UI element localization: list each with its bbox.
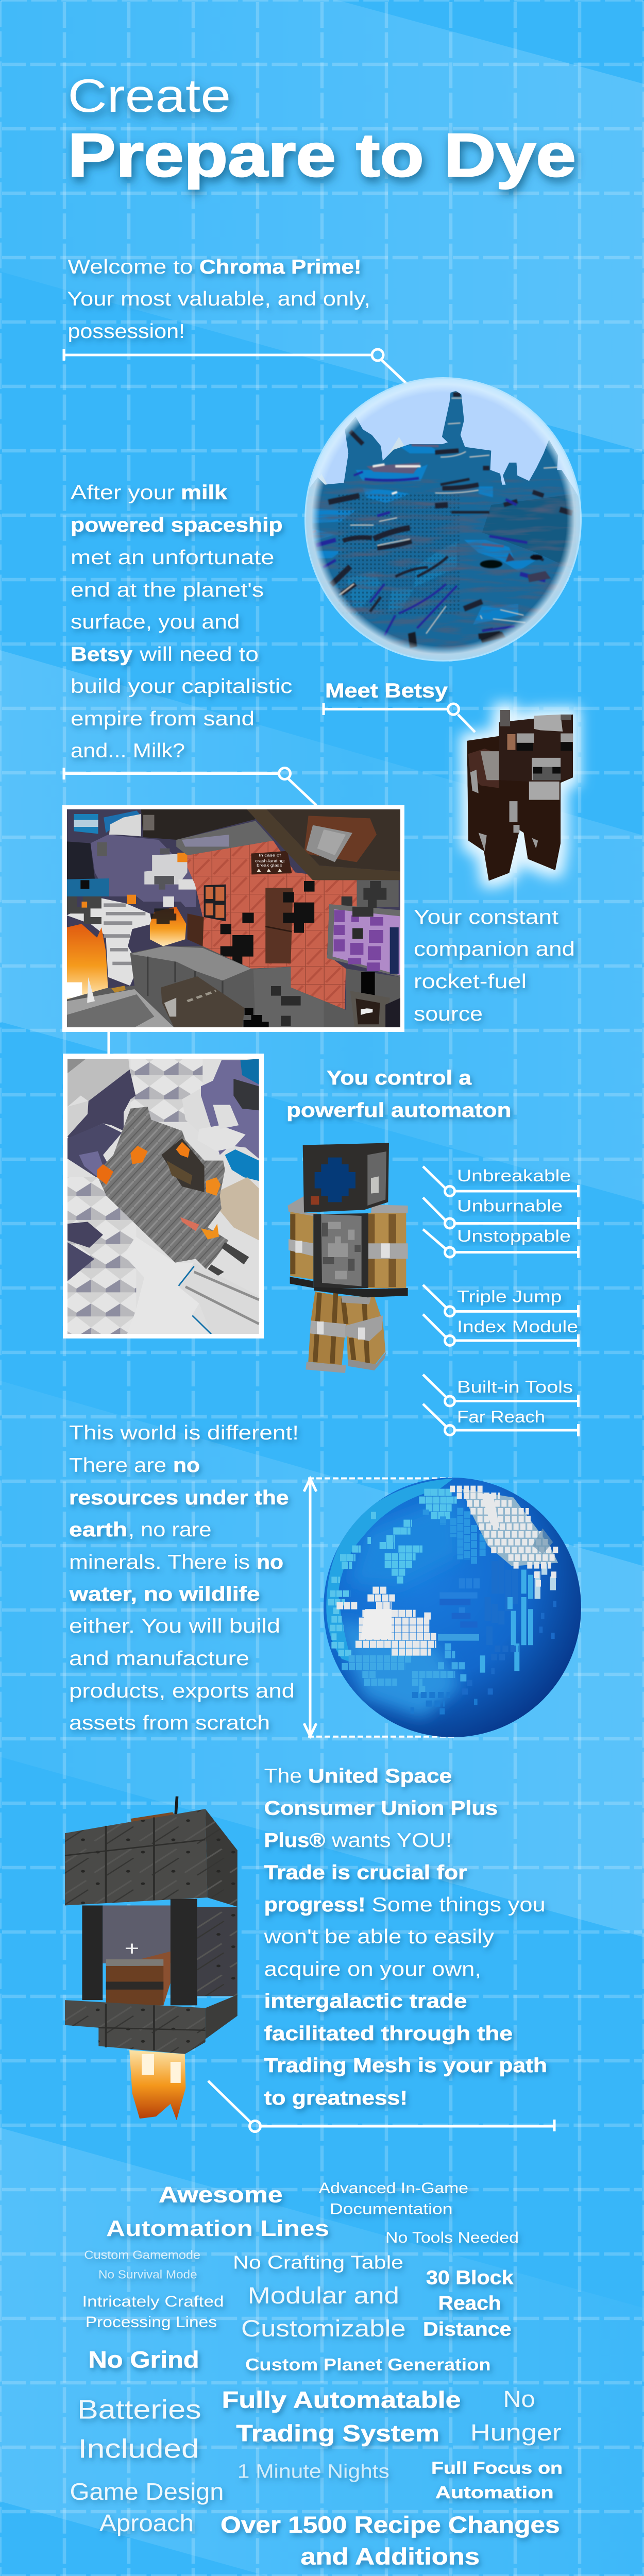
- intro text: Your most valuable, and only,: [67, 288, 370, 310]
- story text: After your: [71, 482, 175, 504]
- world description text: earth: [69, 1519, 127, 1541]
- feature word cloud: No: [503, 2386, 535, 2412]
- feature word cloud: No Grind: [88, 2346, 199, 2373]
- trade text: intergalactic trade: [264, 1990, 467, 2012]
- feature word cloud: Documentation: [330, 2200, 452, 2217]
- trade text: facilitated through the: [264, 2023, 513, 2045]
- feature word cloud: Game Design: [70, 2478, 224, 2505]
- world description text: no: [257, 1551, 283, 1573]
- icon: betsy the cow: [467, 710, 573, 881]
- text: betsy description: rocket-fuel: [414, 971, 527, 993]
- label: unbreakable: Unbreakable: [457, 1166, 571, 1185]
- title: [68, 70, 576, 190]
- feature word cloud: Aproach: [99, 2510, 194, 2536]
- callout line to first screenshot: [64, 768, 316, 805]
- label: unbreakable: [423, 1166, 578, 1197]
- text: betsy description: [414, 906, 575, 1025]
- story text: met an unfortunate: [71, 547, 274, 569]
- image: crash site screenshot: break glass: [257, 863, 282, 868]
- label: unburnable: [423, 1196, 578, 1229]
- trade text: won't be able to easily: [263, 1926, 495, 1948]
- feature word cloud: Distance: [423, 2319, 511, 2341]
- heading: automaton: [286, 1067, 511, 1122]
- trade text: [263, 1765, 547, 2109]
- world description text: There are: [69, 1454, 166, 1477]
- world description text: , no rare: [128, 1519, 211, 1541]
- image: planet surface: [301, 377, 585, 665]
- feature word cloud: Advanced In-Game: [319, 2180, 468, 2197]
- image: aerial crash screenshot: [63, 1032, 264, 1338]
- story text: will need to: [139, 643, 259, 666]
- world description text: products, exports and: [69, 1680, 295, 1702]
- world description text: no: [173, 1454, 200, 1477]
- label: far reach: Far Reach: [457, 1408, 545, 1426]
- label: built-in tools: [423, 1375, 578, 1407]
- icon: rocket machine: [65, 1797, 238, 2120]
- feature word cloud: Batteries: [77, 2395, 201, 2425]
- label: unstoppable: [423, 1227, 578, 1258]
- trade text: The: [264, 1765, 302, 1787]
- world description text: either. You will build: [69, 1615, 280, 1637]
- title: Create: [68, 70, 231, 122]
- trade text: Plus®: [264, 1829, 325, 1852]
- dimension arrow: [304, 1479, 454, 1737]
- image: voxel planet: [324, 1478, 581, 1737]
- text: betsy description: source: [414, 1003, 483, 1025]
- title: Prepare to Dye: [68, 121, 576, 190]
- feature word cloud: [70, 2180, 563, 2570]
- callout line to planet: [64, 349, 411, 387]
- feature word cloud: Awesome: [159, 2182, 282, 2208]
- story text: and... Milk?: [71, 740, 185, 762]
- trade text: Trade is crucial for: [264, 1862, 467, 1884]
- label: triple jump: Triple Jump: [457, 1287, 562, 1306]
- story text: Betsy: [71, 643, 132, 666]
- label: built-in tools: Built-in Tools: [457, 1378, 573, 1396]
- trade text: Some things you: [372, 1894, 546, 1916]
- heading: meet betsy: Meet Betsy: [325, 680, 448, 702]
- feature word cloud: Full Focus on: [431, 2459, 563, 2477]
- trade text: wants YOU!: [331, 1829, 452, 1852]
- trade text: United Space: [308, 1765, 452, 1787]
- feature word cloud: Processing Lines: [86, 2314, 217, 2331]
- feature word cloud: Automation: [435, 2483, 554, 2502]
- story text: [71, 482, 293, 762]
- trade text: acquire on your own,: [264, 1958, 481, 1980]
- feature word cloud: No Survival Mode: [98, 2268, 197, 2281]
- feature word cloud: No Tools Needed: [385, 2229, 519, 2246]
- story text: empire from sand: [71, 708, 255, 730]
- feature word cloud: Custom Gamemode: [84, 2248, 200, 2262]
- feature word cloud: Intricately Crafted: [82, 2293, 224, 2310]
- story text: end at the planet's: [71, 579, 264, 601]
- image: crash site screenshot: [62, 804, 407, 1036]
- label: unstoppable: Unstoppable: [457, 1227, 571, 1245]
- intro text: [67, 256, 370, 343]
- callout line to cow: [324, 703, 475, 732]
- text: betsy description: Your constant: [414, 906, 558, 928]
- feature word cloud: Included: [78, 2434, 199, 2464]
- label: unburnable: Unburnable: [457, 1196, 563, 1215]
- feature word cloud: Hunger: [470, 2419, 562, 2446]
- intro text: Chroma Prime!: [199, 256, 362, 278]
- intro text: Welcome to: [68, 256, 193, 278]
- feature word cloud: Trading System: [236, 2420, 439, 2447]
- feature word cloud: Fully Automatable: [222, 2387, 461, 2413]
- heading: automaton: You control a: [327, 1067, 471, 1089]
- world description text: water, no wildlife: [69, 1583, 260, 1605]
- label: far reach: [423, 1404, 578, 1436]
- world description text: minerals. There is: [69, 1551, 250, 1573]
- story text: build your capitalistic: [71, 675, 293, 698]
- feature word cloud: No Crafting Table: [233, 2252, 403, 2273]
- feature word cloud: 30 Block: [426, 2267, 514, 2289]
- intro text: possession!: [68, 320, 185, 343]
- world description text: and manufacture: [69, 1648, 249, 1670]
- label: index module: [423, 1314, 578, 1347]
- label: index module: Index Module: [457, 1317, 578, 1336]
- image: crash site screenshot: In case of: [259, 853, 281, 857]
- feature word cloud: Over 1500 Recipe Changes: [221, 2512, 560, 2538]
- automaton feature labels: [423, 1166, 578, 1436]
- trade text: Consumer Union Plus: [264, 1797, 498, 1819]
- world description text: assets from scratch: [69, 1712, 270, 1734]
- callout line to machine: [208, 2081, 554, 2132]
- feature word cloud: Customizable: [241, 2315, 406, 2342]
- story text: powered spaceship: [71, 514, 282, 536]
- heading: automaton: powerful automaton: [286, 1099, 511, 1122]
- world description text: [69, 1422, 299, 1734]
- feature word cloud: 1 Minute Nights: [238, 2461, 389, 2483]
- world description text: This world is different!: [69, 1422, 299, 1444]
- feature word cloud: and Additions: [301, 2544, 480, 2570]
- trade text: to greatness!: [264, 2087, 408, 2109]
- text: betsy description: companion and: [414, 938, 575, 960]
- feature word cloud: Modular and: [248, 2282, 399, 2309]
- image: crash site screenshot: crash-landing:: [255, 858, 285, 863]
- feature word cloud: Reach: [438, 2293, 501, 2314]
- feature word cloud: Custom Planet Generation: [245, 2355, 491, 2374]
- feature word cloud: Automation Lines: [106, 2216, 329, 2241]
- trade text: progress!: [264, 1894, 366, 1916]
- story text: milk: [181, 482, 227, 504]
- trade text: Trading Mesh is your path: [264, 2055, 547, 2077]
- story text: surface, you and: [71, 611, 240, 633]
- world description text: resources under the: [69, 1487, 289, 1509]
- icon: automaton character: [287, 1143, 408, 1373]
- label: triple jump: [423, 1285, 578, 1317]
